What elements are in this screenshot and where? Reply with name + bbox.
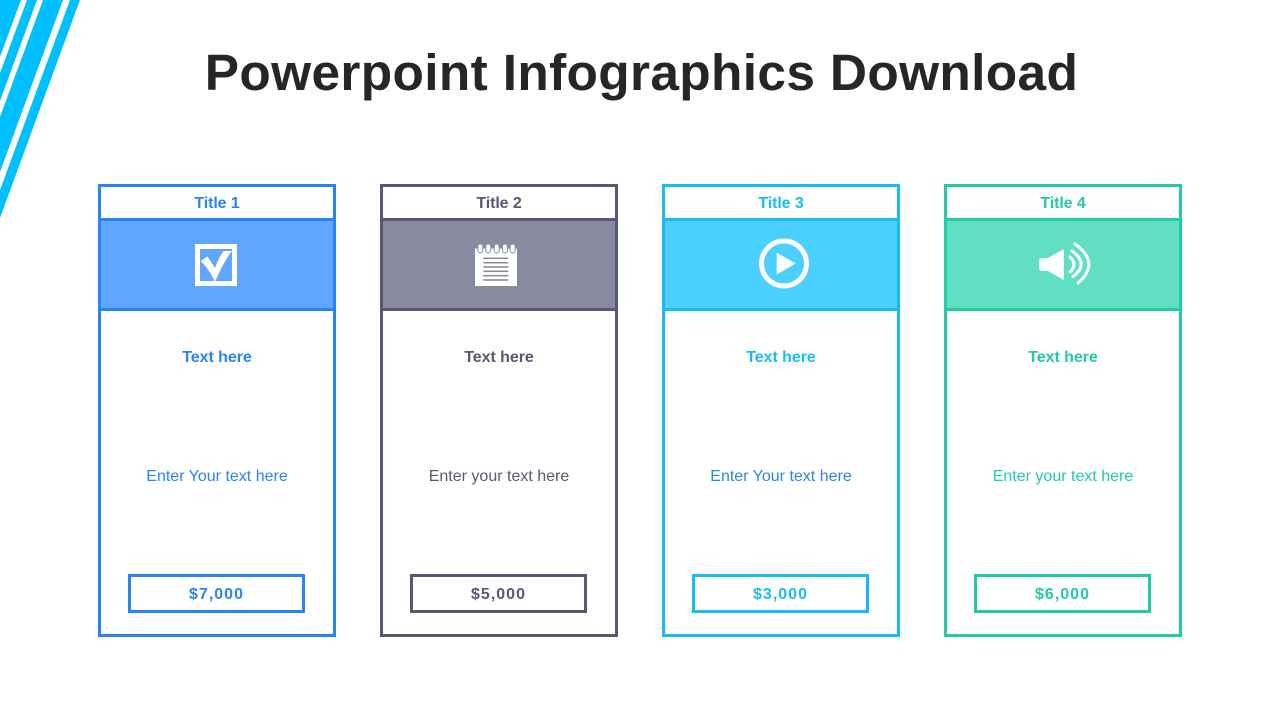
panel 3 price — [692, 574, 869, 613]
panel 4 subheading: Text here — [1028, 349, 1098, 366]
panel 4 icon band — [944, 218, 1182, 311]
panel 3 heading: Title 3 — [758, 195, 804, 212]
panel 2 heading: Title 2 — [476, 195, 522, 212]
panel 1 heading: Title 1 — [194, 195, 240, 212]
panel 2 icon band — [380, 218, 618, 311]
panel 2 subheading: Text here — [464, 349, 534, 366]
panel 3 icon band — [662, 218, 900, 311]
panel 2 price: $5,000 — [471, 586, 526, 603]
panel 1 subheading: Text here — [182, 349, 252, 366]
panel 3 subheading: Text here — [746, 349, 816, 366]
panel 2 body text: Enter your text here — [429, 468, 569, 485]
icon: checkbox — [195, 244, 237, 286]
panel 1 icon band — [98, 218, 336, 311]
panel 3 price: $3,000 — [753, 586, 808, 603]
panel 1 price — [128, 574, 305, 613]
decorative corner stripes — [0, 0, 80, 218]
panel 3 body text: Enter Your text here — [710, 468, 852, 485]
panel 4 price: $6,000 — [1035, 586, 1090, 603]
panel: title 3 — [662, 184, 900, 637]
icon: speaker — [1039, 242, 1090, 285]
panel: title 4 — [944, 184, 1182, 637]
icon: play button — [759, 238, 809, 288]
panel 1 body text: Enter Your text here — [146, 468, 288, 485]
panel 4 heading: Title 4 — [1040, 195, 1086, 212]
panel 1 price: $7,000 — [189, 586, 244, 603]
title: Powerpoint Infographics Download — [205, 42, 1078, 100]
icon: notepad — [475, 244, 517, 286]
panel 4 price — [974, 574, 1151, 613]
panel 2 price — [410, 574, 587, 613]
panel: title 1 — [98, 184, 336, 637]
panel: title 2 — [380, 184, 618, 637]
panel 4 body text: Enter your text here — [993, 468, 1133, 485]
